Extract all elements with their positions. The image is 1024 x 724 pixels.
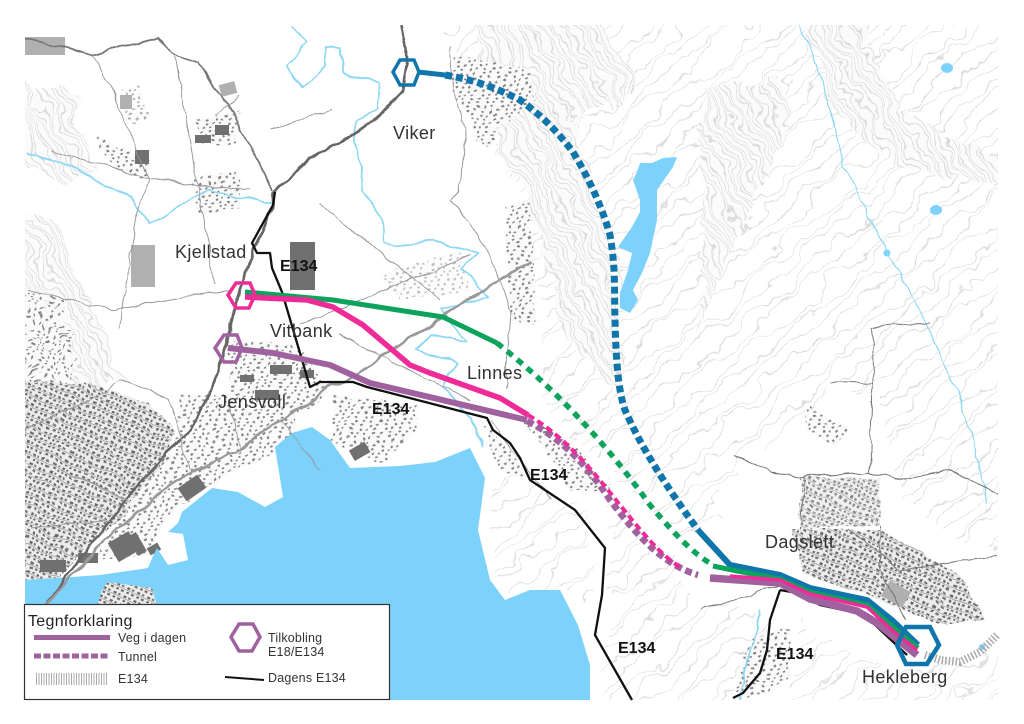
land: south-west peninsula: [97, 582, 157, 606]
road labels: [280, 258, 813, 663]
water: fjord: [25, 427, 590, 700]
connection hexagon: Hekleberg: [897, 627, 939, 664]
road labels: E134: [776, 646, 813, 663]
road alignment: purple: [228, 348, 917, 655]
lake: [618, 157, 677, 313]
place names: Hekleberg: [862, 667, 948, 687]
place names: Viker: [393, 123, 436, 143]
place names: Linnes: [467, 363, 522, 383]
road alignment: pink: [245, 297, 917, 650]
road labels: E134: [618, 640, 655, 657]
tunnel track east of Hekleberg: [925, 634, 998, 662]
legend: connection: [231, 624, 325, 659]
legend: E134 track: [36, 672, 148, 686]
legend: road in the open: Veg i dagen: [118, 631, 186, 645]
small ponds: [884, 63, 985, 650]
legend: E134 track: E134: [118, 672, 148, 686]
legend: current E134: Dagens E134: [268, 671, 346, 685]
connection hexagon: green/pink: [228, 283, 255, 308]
connection hexagon: Viker: [393, 60, 419, 85]
place names: Kjellstad: [175, 242, 247, 262]
road labels: E134: [280, 258, 317, 275]
legend: connection: Tilkobling: [268, 631, 322, 645]
connection hexagon: purple: [215, 335, 242, 362]
road alignment: green: [245, 292, 918, 648]
legend: tunnel: Tunnel: [118, 650, 157, 664]
legend title: Tegnforklaring: [28, 613, 133, 630]
place names: Dagslett: [765, 532, 834, 552]
road labels: E134: [372, 401, 409, 418]
place names: [175, 123, 948, 687]
buildings: [25, 37, 911, 608]
place names: Vitbank: [270, 321, 333, 341]
existing E134 road: [252, 192, 907, 700]
legend: current E134: [225, 671, 346, 685]
place names: Jensvoll: [218, 392, 286, 412]
legend: connection: E18/E134: [268, 645, 325, 659]
legend: tunnel: [34, 650, 157, 664]
road alignment: blue: [418, 72, 918, 645]
road labels: E134: [530, 467, 567, 484]
legend panel: [24, 604, 390, 700]
road network: [25, 25, 998, 620]
